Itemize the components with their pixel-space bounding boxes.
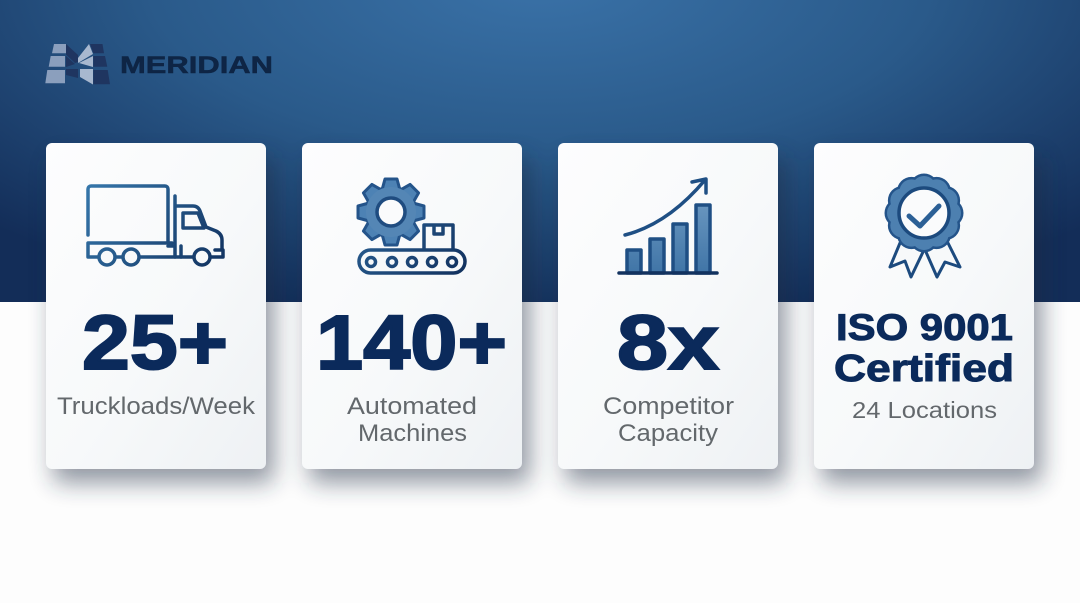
label: Competitor Capacity: Capacity	[618, 420, 718, 447]
stat: ISO 9001 Certified	[834, 307, 1014, 390]
stat: 8x: 8x	[617, 300, 719, 386]
icon: truck	[88, 186, 223, 265]
label: Competitor Capacity: Competitor	[603, 393, 734, 420]
stat: 140+: 140+	[316, 300, 507, 386]
stat: ISO 9001 Certified: ISO 9001	[836, 307, 1013, 348]
label: 24 Locations: 24 Locations	[852, 397, 997, 423]
panel: certification	[814, 143, 1034, 469]
stat: ISO 9001 Certified: Certified	[834, 348, 1014, 390]
label: Competitor Capacity	[603, 393, 734, 447]
icon: award badge	[884, 174, 964, 277]
logo wordmark: MERIDIAN	[120, 52, 273, 79]
panel: truckloads	[46, 143, 266, 469]
label: Automated Machines: Machines	[358, 420, 467, 447]
stat: 25+: 25+	[82, 300, 228, 386]
icon: growth bar chart	[619, 179, 717, 273]
logo: Meridian	[45, 44, 273, 84]
logo mark	[45, 44, 110, 84]
card shadows	[53, 158, 1042, 483]
icon: gear and conveyor	[358, 179, 465, 273]
panel: capacity	[558, 143, 778, 469]
label: Truckloads/Week: Truckloads/Week	[57, 393, 256, 420]
panel: machines	[302, 143, 522, 469]
label: Automated Machines: Automated	[347, 393, 477, 420]
label: Automated Machines	[347, 393, 477, 447]
